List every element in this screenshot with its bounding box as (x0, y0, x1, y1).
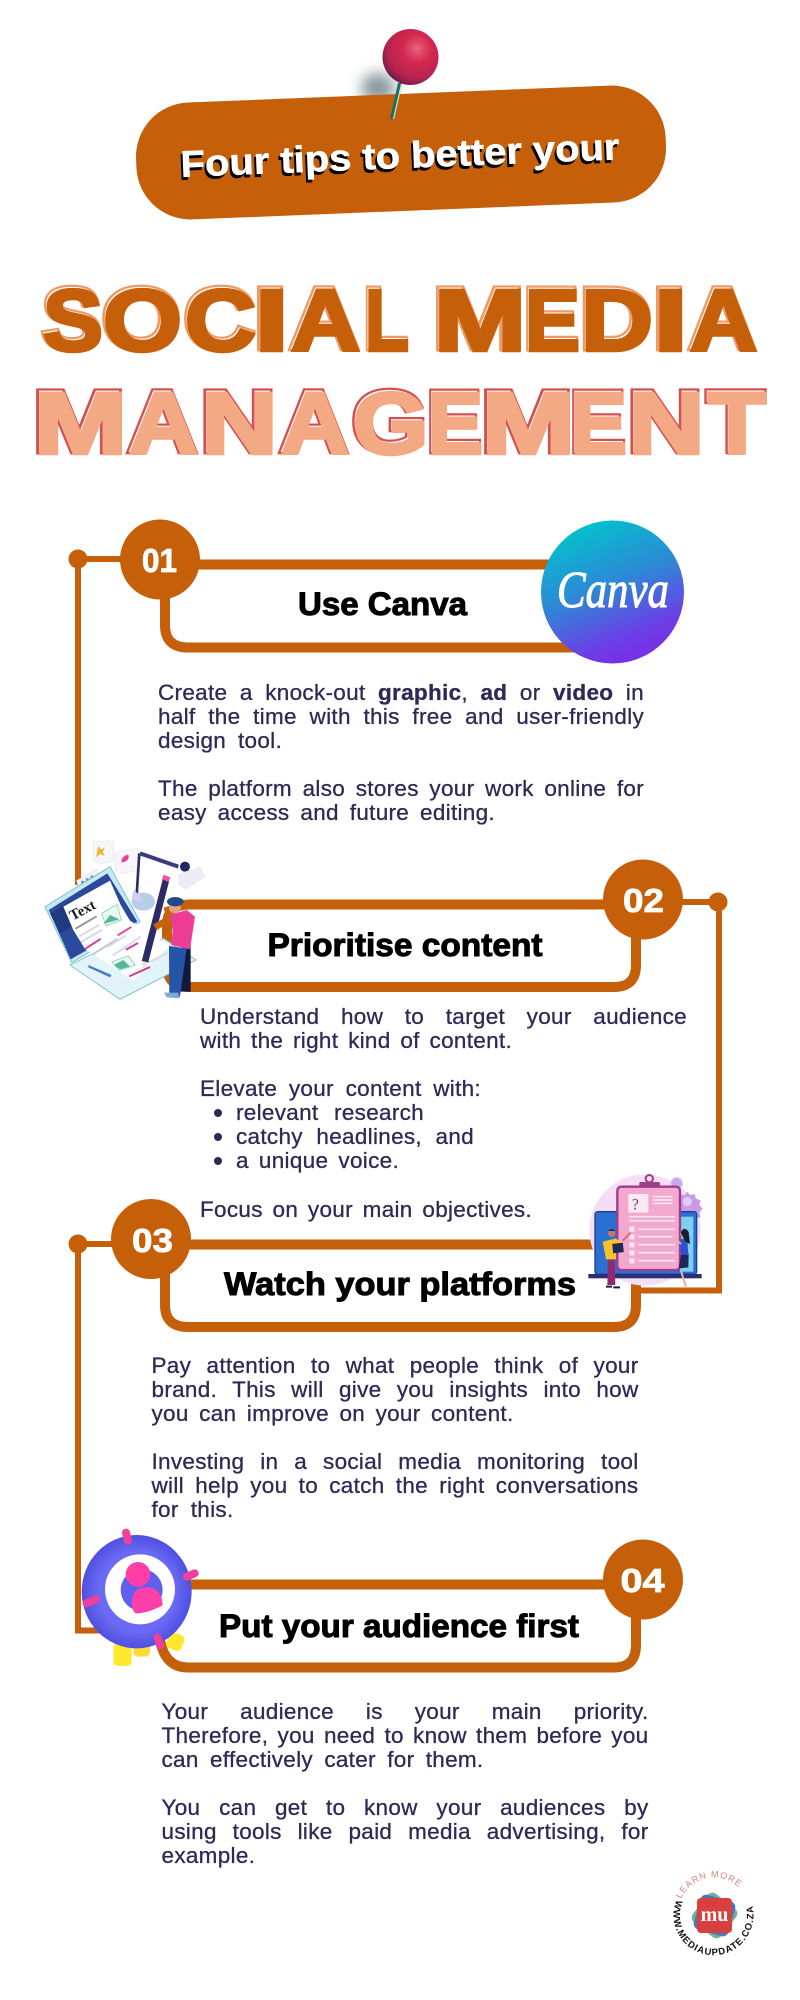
illustration: laptop, lamp and man with pencil (45, 841, 206, 999)
title line: SOCIAL MEDIA: A (291, 272, 360, 370)
title line: SOCIAL MEDIA: C (185, 272, 256, 370)
title line: MANAGEMENT: E (570, 374, 626, 470)
number badge 04 (603, 1540, 683, 1620)
title line: SOCIAL MEDIA: E (525, 272, 580, 370)
title line: MANAGEMENT: A (128, 374, 196, 470)
text block: tip 02 body: relevant research (236, 1100, 424, 1125)
title line: MANAGEMENT: A (280, 374, 348, 470)
title line: SOCIAL MEDIA: S (42, 270, 102, 368)
heading: Watch your platforms: Watch your platforms (224, 1266, 576, 1302)
title line: SOCIAL MEDIA: C (184, 270, 254, 368)
text block: tip 03 body: brand. This will give you insights into how (152, 1377, 638, 1402)
text block: tip 03 body: will help you to catch the right conversations (152, 1473, 638, 1498)
title line: SOCIAL MEDIA: D (580, 270, 652, 368)
title line: MANAGEMENT: E (428, 376, 483, 472)
title line: MANAGEMENT: M (32, 374, 126, 470)
text block: tip 04 body: Therefore, you need to know them before you (162, 1723, 648, 1748)
title line: MANAGEMENT: N (627, 374, 703, 470)
illustration word: Text: Text (67, 897, 99, 924)
text block: tip 04 body: example. (162, 1843, 255, 1868)
illustration: audience target ring (82, 1533, 195, 1666)
logo: mediaupdate badge: mu (701, 1904, 728, 1926)
title line: SOCIAL MEDIA: C (184, 270, 254, 368)
title line: MANAGEMENT: E (571, 376, 627, 472)
number badge 01 (120, 520, 200, 600)
icon: Canva logo circle: Canva (557, 562, 669, 619)
title line: MANAGEMENT: E (426, 374, 482, 470)
icon shadow of pin (361, 73, 395, 103)
title line: SOCIAL MEDIA: L (365, 272, 409, 370)
title line: MANAGEMENT: N (628, 376, 704, 472)
title line: SOCIAL MEDIA: I (253, 270, 287, 368)
title line: SOCIAL MEDIA: O (102, 270, 180, 368)
title line: SOCIAL MEDIA: A (688, 270, 756, 368)
tip 01 header frame (120, 520, 600, 648)
title line: MANAGEMENT: M (482, 376, 575, 472)
title line: MANAGEMENT: E (426, 374, 482, 470)
number badge 01: 01 (142, 542, 177, 579)
banner label with shadow: Four tips to better your (178, 129, 618, 188)
logo: mediaupdate badge: LEARN MORE (676, 1871, 742, 1898)
text block: tip 02 body (200, 1004, 687, 1222)
title line: MANAGEMENT: E (570, 374, 626, 470)
text block: tip 04 body: using tools like paid media advertising, for (162, 1819, 648, 1844)
text block: tip 01 body (158, 680, 644, 825)
title line: SOCIAL MEDIA: L (364, 270, 408, 368)
text block: tip 01 body: Create a knock-out graphic, ad or video in (158, 680, 644, 705)
text block: tip 03 body (151, 1353, 638, 1522)
title line: MANAGEMENT: G (352, 374, 427, 470)
tip 03 header frame (111, 1199, 636, 1327)
title line: SOCIAL MEDIA: S (43, 272, 103, 370)
title line: SOCIAL MEDIA: I (254, 272, 289, 370)
number badge 03: 03 (132, 1222, 173, 1259)
title line: SOCIAL MEDIA (42, 270, 757, 370)
title line: SOCIAL MEDIA: S (42, 270, 102, 368)
text block: tip 03 body: Pay attention to what people think of your (152, 1353, 638, 1378)
illustration: clipboard survey with two people (588, 1174, 703, 1287)
title line: MANAGEMENT: M (480, 374, 574, 470)
title line: MANAGEMENT: M (34, 376, 127, 472)
title line: SOCIAL MEDIA: M (432, 270, 524, 368)
icon: red push pin (382, 29, 438, 119)
title line: MANAGEMENT: A (281, 376, 349, 472)
text block: tip 02 body: catchy headlines, and (236, 1124, 474, 1149)
icon: Canva logo circle (541, 520, 684, 664)
text block: tip 01 body: easy access and future editing. (158, 800, 495, 825)
title line: SOCIAL MEDIA: I (652, 270, 686, 368)
text block: tip 01 body: half the time with this free and user-friendly (158, 704, 644, 729)
text block: tip 03 body: you can improve on your content. (152, 1401, 514, 1426)
tip 02 header frame (167, 860, 683, 987)
title line: SOCIAL MEDIA: M (432, 270, 524, 368)
connector lines and dots between tips (68, 550, 728, 1630)
title line: SOCIAL MEDIA: A (688, 270, 756, 368)
title line: MANAGEMENT: N (627, 374, 703, 470)
title line: MANAGEMENT: A (280, 374, 348, 470)
text block: tip 02 body: Understand how to target your audience (200, 1004, 687, 1029)
title line: SOCIAL MEDIA: E (524, 270, 578, 368)
title line: MANAGEMENT: N (202, 376, 278, 472)
text block: tip 04 body: You can get to know your audiences by (162, 1795, 648, 1820)
title line: MANAGEMENT: G (352, 374, 427, 470)
text block: tip 03 body: for this. (152, 1497, 234, 1522)
logo: mediaupdate badge: WWW.MEDIAUPDATE.CO.ZA (674, 1902, 754, 1956)
title line: MANAGEMENT: T (706, 374, 764, 470)
text block: tip 02 body: a unique voice. (236, 1148, 399, 1173)
text block: tip 04 body: can effectively cater for them. (162, 1747, 484, 1772)
number badge 04: 04 (620, 1562, 665, 1599)
title line: SOCIAL MEDIA: A (290, 270, 358, 368)
title line: SOCIAL MEDIA: I (652, 270, 686, 368)
title line: SOCIAL MEDIA: O (103, 272, 182, 370)
logo: mediaupdate badge (674, 1871, 754, 1956)
title line: MANAGEMENT: T (706, 374, 764, 470)
title line: SOCIAL MEDIA: L (364, 270, 408, 368)
title line: SOCIAL MEDIA: I (253, 270, 287, 368)
title line: SOCIAL MEDIA: O (102, 270, 180, 368)
title line: MANAGEMENT: A (128, 374, 196, 470)
number badge 02 (603, 860, 683, 940)
title line: SOCIAL MEDIA: M (434, 272, 526, 370)
text block: tip 04 body: Your audience is your main priority. (162, 1699, 648, 1724)
title line: SOCIAL MEDIA: A (690, 272, 757, 370)
number badge 02: 02 (623, 882, 664, 919)
text block: tip 02 body: Focus on your main objectives. (200, 1197, 532, 1222)
number badge 03 (111, 1199, 191, 1279)
text block: tip 01 body: The platform also stores your work online for (158, 776, 644, 801)
title line: SOCIAL MEDIA: I (654, 272, 688, 370)
title line: SOCIAL MEDIA: A (290, 270, 358, 368)
title line: MANAGEMENT: M (32, 374, 126, 470)
text block: tip 03 body: Investing in a social media monitoring tool (152, 1449, 638, 1474)
title line: SOCIAL MEDIA: D (581, 272, 653, 370)
heading: Put your audience first: Put your audience first (219, 1608, 579, 1644)
question mark: ? (632, 1196, 639, 1213)
text block: tip 01 body: design tool. (158, 728, 282, 753)
heading: Use Canva: Use Canva (298, 586, 467, 622)
text block: tip 02 body: Elevate your content with: (200, 1076, 481, 1101)
heading: Prioritise content: Prioritise content (268, 927, 543, 963)
title line: MANAGEMENT (32, 374, 766, 472)
tip 04 header frame (160, 1540, 683, 1668)
text block: tip 02 body: with the right kind of content. (200, 1028, 512, 1053)
title line: MANAGEMENT: G (353, 376, 429, 472)
title line: MANAGEMENT: N (200, 374, 276, 470)
banner: orange tilted pill (134, 83, 668, 222)
title line: SOCIAL MEDIA: D (580, 270, 652, 368)
text block: tip 04 body (162, 1699, 648, 1868)
title line: MANAGEMENT: N (200, 374, 276, 470)
banner label with shadow: Four tips to better your (180, 126, 620, 185)
title line: MANAGEMENT: T (708, 376, 766, 472)
title line: MANAGEMENT: A (129, 376, 198, 472)
title line: SOCIAL MEDIA: E (524, 270, 578, 368)
title line: MANAGEMENT: M (480, 374, 574, 470)
